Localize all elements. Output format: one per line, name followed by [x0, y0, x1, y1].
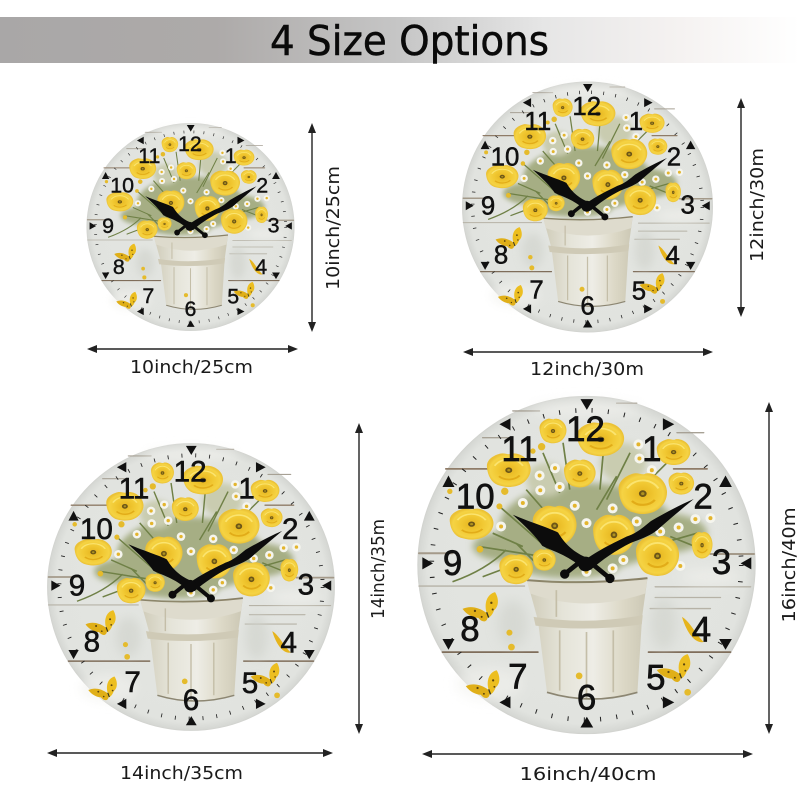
- clock: 16 inch: 4: [692, 611, 711, 650]
- clock: 16 inch: [417, 396, 756, 734]
- clock: 10 inch: 1: [225, 144, 237, 168]
- dimension: 12 inch width arrow: [463, 348, 713, 356]
- clock: 12 inch: 9: [481, 192, 495, 220]
- clock: 10 inch: 2: [256, 173, 268, 197]
- clock: 10 inch: 7: [142, 284, 154, 308]
- clock: 14 inch: 2: [282, 513, 298, 546]
- clock: 12 inch: [462, 82, 713, 332]
- clock: 14 inch: 8: [84, 626, 100, 659]
- clock: 14 inch: 3: [298, 569, 314, 602]
- clock: 12 inch: 1: [629, 108, 643, 136]
- clock: 12 inch: 6: [580, 292, 595, 320]
- clock: 14 inch: 6: [183, 684, 199, 717]
- clock: 10 inch: 10: [110, 173, 134, 197]
- label: 12 inch height: 12inch/30m: [747, 148, 768, 262]
- clock: 12 inch: 7: [529, 277, 544, 305]
- label: 16 inch height: 16inch/40m: [779, 508, 800, 622]
- dimension: 16 inch width arrow: [422, 750, 753, 758]
- clock: 16 inch: 5: [646, 659, 666, 698]
- dimension: 16 inch height arrow: [765, 402, 773, 734]
- clock: 12 inch: 11: [524, 108, 551, 136]
- label: 10 inch width: 10inch/25cm: [130, 357, 253, 378]
- clock: 10 inch: [86, 123, 295, 331]
- clock: 14 inch: 5: [242, 667, 258, 700]
- clock: 10 inch: 11: [138, 144, 160, 168]
- clock: 12 inch: 8: [494, 241, 508, 269]
- clock: 14 inch: [47, 443, 335, 731]
- clock: 14 inch: 11: [119, 473, 149, 506]
- clock: 16 inch: 8: [460, 610, 480, 649]
- clock: 16 inch: 3: [712, 543, 731, 582]
- clock: 10 inch: 9: [102, 214, 114, 238]
- clock: 12 inch: 5: [632, 277, 646, 305]
- clock: 10 inch: 4: [255, 255, 267, 279]
- clock: 10 inch: 8: [113, 255, 125, 279]
- clock: 16 inch: 11: [501, 430, 538, 469]
- clock: 14 inch: 7: [124, 666, 141, 699]
- label: 14 inch width: 14inch/35cm: [120, 763, 243, 784]
- dimension: 14 inch width arrow: [47, 749, 333, 757]
- clock: 10 inch: 3: [268, 214, 279, 238]
- clock: 16 inch: 9: [443, 544, 462, 583]
- clock: 10 inch: 5: [227, 285, 239, 309]
- clock: 10 inch: 12: [178, 132, 202, 156]
- clock: 10 inch: 6: [185, 297, 196, 321]
- clock: 16 inch: 7: [508, 658, 528, 697]
- clock: 14 inch: 4: [281, 626, 297, 659]
- clock: 12 inch: 3: [680, 192, 695, 220]
- clock: 12 inch: 2: [667, 143, 681, 171]
- title: 4 Size Options: [270, 17, 549, 65]
- clock: 12 inch: 10: [491, 143, 519, 171]
- clock: 16 inch: 10: [456, 478, 495, 517]
- clock: 14 inch: 1: [238, 473, 255, 506]
- clock: 16 inch: 12: [566, 410, 605, 449]
- clock: 16 inch: 6: [577, 679, 596, 718]
- label: 12 inch width: 12inch/30m: [530, 359, 644, 380]
- dimension: 14 inch height arrow: [355, 423, 363, 734]
- label: 14 inch height: 14inch/35m: [368, 519, 389, 619]
- clock: 14 inch: 10: [80, 513, 113, 546]
- clock: 14 inch: 12: [174, 456, 207, 489]
- clock: 16 inch: 2: [693, 478, 713, 517]
- clock: 14 inch: 9: [69, 570, 85, 603]
- clock: 12 inch: 4: [666, 242, 680, 270]
- title banner: [0, 17, 800, 65]
- dimension: 12 inch height arrow: [737, 98, 745, 317]
- label: 10 inch height: 10inch/25cm: [323, 166, 344, 290]
- dimension: 10 inch width arrow: [87, 345, 298, 353]
- label: 16 inch width: 16inch/40cm: [520, 764, 656, 785]
- clock: 16 inch: 1: [642, 430, 662, 469]
- dimension: 10 inch height arrow: [308, 123, 316, 332]
- clock: 12 inch: 12: [572, 93, 601, 121]
